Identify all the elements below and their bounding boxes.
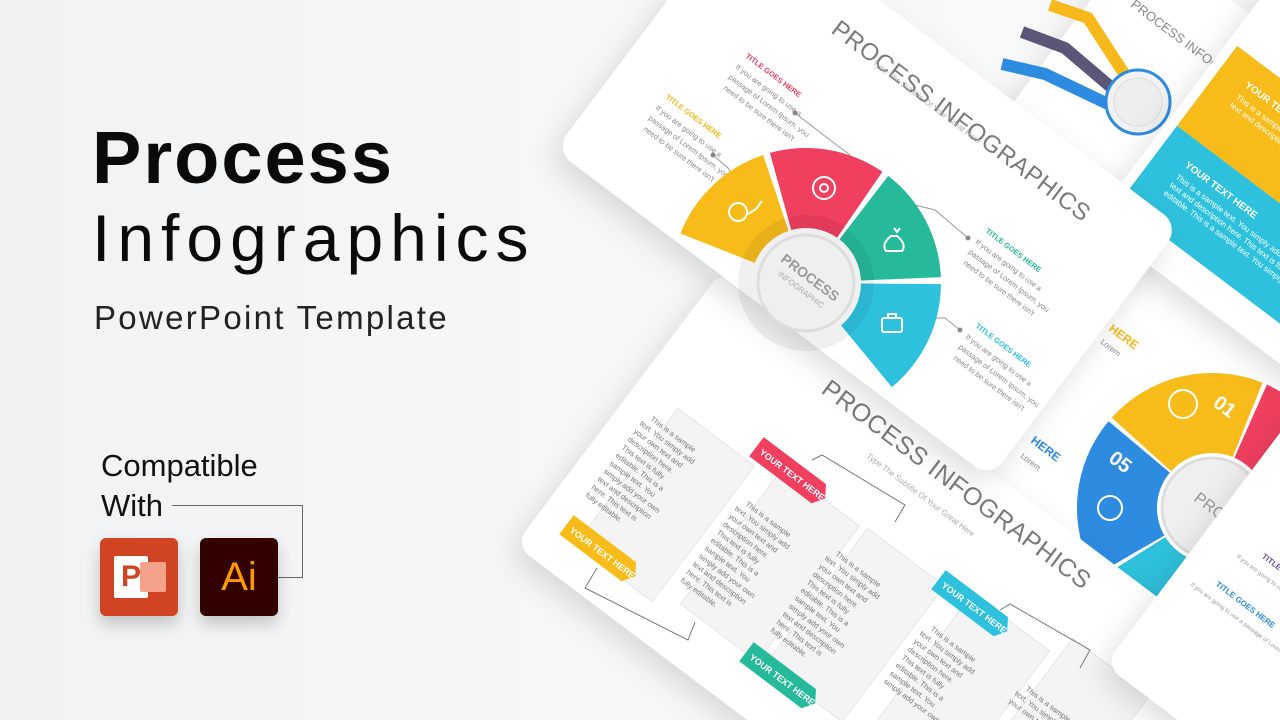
slide: bottom text boxes: text. You simply add [733, 504, 792, 551]
slide: bottom text boxes: description here. [811, 570, 861, 610]
icon: PowerPoint [100, 538, 178, 616]
slide: back donut [960, 120, 1280, 720]
slide: bottom text boxes: text. You simply add [638, 419, 697, 466]
slide: bottom text boxes: simply add your own [697, 552, 757, 600]
slide: main half donut [555, 0, 1180, 478]
segment icons [729, 177, 904, 332]
labels: need to be sure there isn't [642, 124, 717, 184]
labels: TITLE GOES HERE [664, 92, 723, 140]
slide: bottom text boxes: This text is fully [715, 528, 761, 566]
slide: bottom text boxes: sample text. You [888, 669, 937, 709]
slide: back donut: Lorem [1099, 337, 1123, 358]
slide: bottom text boxes: sample text. You [703, 544, 752, 584]
compatible text: With [101, 488, 163, 523]
slide: bottom text boxes: your own text and [912, 637, 965, 680]
slide: bottom text boxes: editable. This is a [614, 451, 666, 493]
slide: back donut: Lorem [1019, 451, 1043, 472]
slide: back donut: PRO [1191, 490, 1229, 524]
half donut [639, 57, 1041, 440]
slide: bottom text boxes: here. This text is [775, 618, 824, 658]
labels: passage of Lorem Ipsum, you [647, 113, 731, 180]
slide: bottom text boxes: description here. [906, 645, 956, 685]
banners: YOUR TEXT HERE [748, 652, 817, 708]
icon: PowerPoint: P [121, 560, 141, 593]
icon: Illustrator [200, 538, 278, 616]
labels: If you are going to use a [734, 62, 804, 119]
slide: top small ribbons [985, 0, 1280, 333]
slide: top right color blocks: YOUR TEXT HERE [1182, 160, 1259, 222]
labels: TITLE GOES HERE [984, 226, 1043, 274]
slide: back donut: 05 [1104, 447, 1136, 478]
labels: need to be sure there isn't [722, 83, 797, 143]
labels: TITLE GOES HERE [974, 321, 1033, 369]
slide: bottom text boxes: fully editable. [584, 491, 624, 524]
banners [559, 437, 1014, 713]
slide: bottom text boxes: sample text. You [793, 594, 842, 634]
half donut: INFOGRAPHIC [776, 269, 826, 310]
compatible text: Compatible [101, 448, 258, 483]
slide: bottom right titles [1105, 401, 1280, 720]
slide title: PROCESS INFOGRAPHICS [826, 15, 1096, 227]
slide: bottom text boxes: editable. This is a [894, 661, 946, 703]
slide: bottom text boxes: editable. This is a [709, 536, 761, 578]
text boxes [576, 408, 1149, 720]
slide: bottom text boxes: fully editable. [769, 626, 809, 659]
slide: bottom text boxes: description here. [626, 435, 676, 475]
slide: bottom text boxes: editable. This is a [799, 586, 851, 628]
slide: bottom text boxes: text and description [596, 475, 653, 521]
slide: top right color blocks [1092, 0, 1280, 535]
labels: TITLE GOES HERE [744, 51, 803, 99]
labels: If you are going to use a [974, 237, 1044, 294]
slide: bottom text boxes: description here. [721, 520, 771, 560]
slide: bottom text boxes: your own text and [817, 562, 870, 605]
slide: back donut: HERE [1028, 433, 1063, 464]
slide: bottom text boxes: This is a sample [649, 414, 697, 454]
slide: main half donut: Type The Subtitle Of Your Great Here [871, 58, 983, 146]
slide: bottom text boxes: here. This text is [590, 483, 639, 523]
banners: YOUR TEXT HERE [568, 525, 637, 581]
slide: bottom text boxes: This text is fully [900, 653, 946, 691]
banners: YOUR TEXT HERE [758, 447, 827, 503]
slide: back donut: 01 [1209, 392, 1240, 423]
slide: bottom text boxes: This is a sample [929, 624, 977, 664]
slide: bottom text boxes: Type The Subtitle Of Your Great Here [865, 451, 977, 539]
subtitle: Infographics: Infographics [92, 201, 536, 275]
slide: bottom text boxes: simply add your own [787, 602, 847, 650]
bracket connector [172, 505, 303, 578]
half donut: PROCESS [778, 250, 842, 304]
icon: Illustrator: Ai [221, 555, 257, 599]
compatible text [101, 448, 258, 523]
labels: If you are going to use a [964, 332, 1034, 389]
slide: back donut: HERE [1106, 321, 1141, 352]
labels: If you are going to use a [654, 103, 724, 160]
slide: bottom text boxes: This text is fully [805, 578, 851, 616]
slide: bottom right titles: TITLE GOES HERE [1214, 580, 1277, 631]
slide: bottom text boxes: text. You simply add [823, 554, 882, 601]
tagline: PowerPoint Template [94, 299, 449, 336]
slide: bottom text boxes: here. This text is [685, 568, 734, 608]
labels: passage of Lorem Ipsum, you [727, 72, 811, 139]
labels: need to be sure there isn't [952, 353, 1027, 413]
slide: bottom text boxes: text and description [781, 610, 838, 656]
labels: passage of Lorem Ipsum, you [957, 342, 1041, 409]
slide: bottom text boxes: text. You simply add [918, 629, 977, 676]
labels: passage of Lorem Ipsum, you [967, 247, 1051, 314]
banners: YOUR TEXT HERE [940, 580, 1009, 636]
title: Process [92, 116, 394, 199]
slide: bottom text boxes: This is a sample [744, 499, 792, 539]
slide: bottom text boxes [515, 269, 1280, 720]
labels: need to be sure there isn't [962, 258, 1037, 318]
slide: bottom text boxes: fully editable. [679, 576, 719, 609]
slide: bottom text boxes: your own text and [727, 512, 780, 555]
slide: bottom text boxes: simply add your own [602, 467, 662, 515]
slide: bottom text boxes: text and description [691, 560, 748, 606]
slide: bottom text boxes: sample text. You [608, 459, 657, 499]
labels [642, 51, 1051, 413]
connector lines [585, 455, 1090, 668]
slide title: PROCESS INFOGRAPHICS [816, 374, 1096, 595]
slide: bottom text boxes: This is a sample [834, 549, 882, 589]
slide: bottom text boxes: This text is fully [620, 443, 666, 481]
slide: bottom text boxes: your own text and [632, 427, 685, 470]
